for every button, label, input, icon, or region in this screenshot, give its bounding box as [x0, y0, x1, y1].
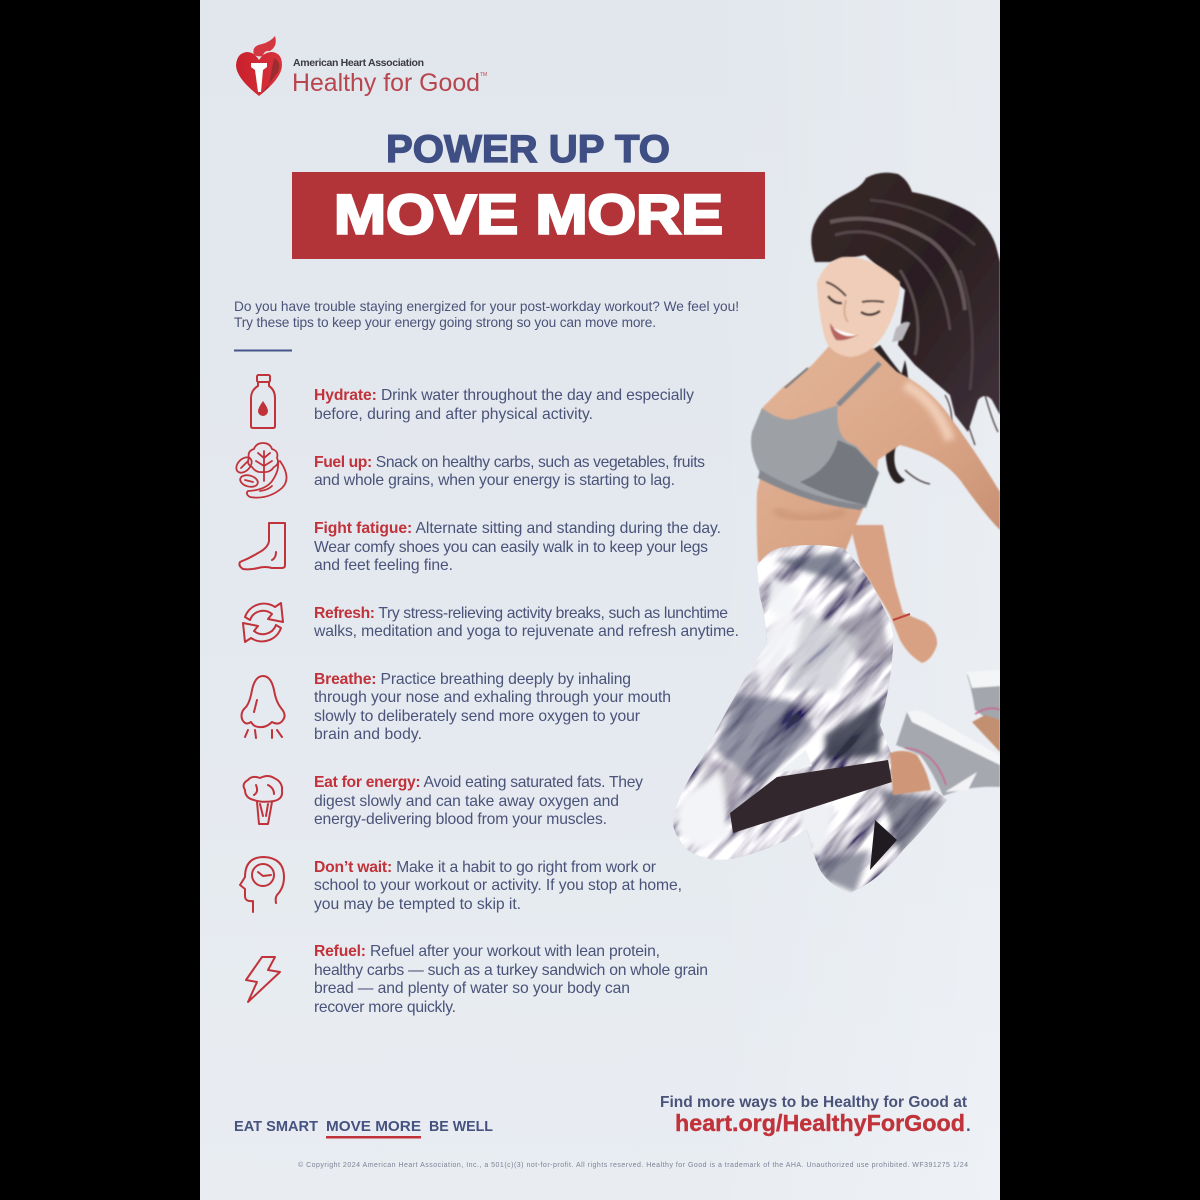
icon: leaf, almonds and banana — [233, 443, 287, 498]
text: Wear comfy shoes you can easily walk in to keep your legs — [314, 539, 708, 556]
leggings — [673, 545, 947, 893]
text — [314, 387, 694, 423]
icon: circular arrows — [243, 603, 283, 642]
body shading — [905, 385, 950, 440]
text — [314, 859, 682, 913]
tip: refresh — [243, 603, 739, 642]
ankle — [890, 751, 931, 795]
text: Don’t wait: Make it a habit to go right from work or — [314, 859, 656, 876]
poster background panel — [200, 0, 1000, 1200]
tip: fight fatigue — [239, 520, 721, 574]
text: through your nose and exhaling through your mouth — [314, 689, 671, 706]
text: Refresh: Try stress-relieving activity breaks, such as lunchtime — [314, 605, 728, 622]
text: Refuel: Refuel after your workout with lean protein, — [314, 943, 660, 960]
tip: fuel up — [233, 443, 705, 498]
text — [314, 774, 643, 828]
face — [817, 257, 900, 357]
text — [314, 671, 671, 743]
call to action: . — [965, 1110, 972, 1137]
intro text: Try these tips to keep your energy going strong so you can move more. — [234, 315, 656, 330]
title: power up to: POWER UP TO — [386, 128, 670, 171]
text: and whole grains, when your energy is starting to lag. — [314, 472, 675, 489]
photo: jumping woman — [673, 172, 1000, 893]
text: bread — and plenty of water so your body can — [314, 980, 630, 997]
icon: broccoli — [244, 776, 282, 824]
lower shoe — [896, 710, 1000, 796]
mesh triangle — [870, 820, 897, 870]
intro text — [234, 299, 739, 330]
icon: head with clock — [240, 857, 284, 912]
text: Fight fatigue: Alternate sitting and standing during the day. — [314, 520, 721, 537]
icon: nose — [242, 676, 285, 738]
trademark: TM — [480, 72, 487, 78]
wordmark: Healthy for Good — [292, 69, 480, 97]
text — [314, 454, 705, 489]
tagline: eat smart move more be well: MOVE MORE — [326, 1118, 421, 1135]
sports bra — [751, 363, 880, 510]
tagline: eat smart move more be well — [234, 1118, 493, 1138]
skin: torso and arm — [752, 345, 1000, 562]
call to action: Find more ways to be Healthy for Good at — [660, 1094, 967, 1111]
logo: American Heart Association Healthy for Good — [236, 36, 487, 97]
intro text: Do you have trouble staying energized for your post-workday workout? We feel you! — [234, 299, 739, 314]
upper shoe and foot — [967, 670, 1000, 752]
icon: foot — [239, 523, 285, 569]
icon: heart and torch — [236, 36, 282, 96]
text — [313, 605, 739, 640]
text: you may be tempted to skip it. — [314, 896, 521, 913]
organization name: American Heart Association — [293, 57, 424, 69]
tip: don't wait — [240, 857, 682, 913]
tie-dye streak texture — [673, 545, 947, 893]
tip: refuel — [246, 943, 708, 1016]
banner: move more: MOVE MORE — [334, 182, 723, 246]
banner: move more — [292, 172, 765, 259]
text: before, during and after physical activity. — [314, 406, 593, 423]
text: Eat for energy: Avoid eating saturated fats. They — [314, 774, 643, 791]
text: walks, meditation and yoga to rejuvenate and refresh anytime. — [313, 623, 739, 640]
tagline: eat smart move more be well: EAT SMART — [234, 1118, 318, 1135]
sheer mesh panel — [730, 760, 892, 833]
text: brain and body. — [314, 726, 422, 743]
icon: lightning bolt — [246, 957, 280, 1002]
call to action: heart.org/HealthyForGood — [675, 1110, 965, 1136]
text: energy-delivering blood from your muscles. — [314, 811, 607, 828]
text — [314, 520, 721, 574]
text: slowly to deliberately send more oxygen to your — [314, 708, 640, 725]
tip: breathe — [242, 671, 671, 743]
hair — [811, 173, 1000, 484]
text: healthy carbs — such as a turkey sandwich on whole grain — [314, 962, 708, 979]
text: Hydrate: Drink water throughout the day and especially — [314, 387, 694, 404]
text: Breathe: Practice breathing deeply by inhaling — [314, 671, 631, 688]
tagline: eat smart move more be well: BE WELL — [429, 1118, 493, 1135]
copyright: © Copyright 2024 American Heart Association, Inc., a 501(c)(3) not-for-profit. All rights reserved. Healthy for Good is a trademark of the AHA. Unauthorized use prohibited. WF391275 1/24 — [298, 1161, 968, 1169]
white gap between legs — [778, 750, 812, 773]
call to action — [660, 1094, 972, 1137]
far arm and hand — [850, 525, 937, 663]
text: and feet feeling fine. — [314, 557, 453, 574]
text: digest slowly and can take away oxygen and — [314, 793, 619, 810]
text — [314, 943, 708, 1016]
tip: hydrate — [251, 375, 694, 428]
tip: eat for energy — [244, 774, 643, 828]
dark and light patches — [675, 552, 945, 893]
icon: water bottle — [251, 375, 275, 428]
text: Fuel up: Snack on healthy carbs, such as vegetables, fruits — [314, 454, 705, 471]
text: school to your workout or activity. If you stop at home, — [314, 877, 682, 894]
text: recover more quickly. — [314, 999, 456, 1016]
